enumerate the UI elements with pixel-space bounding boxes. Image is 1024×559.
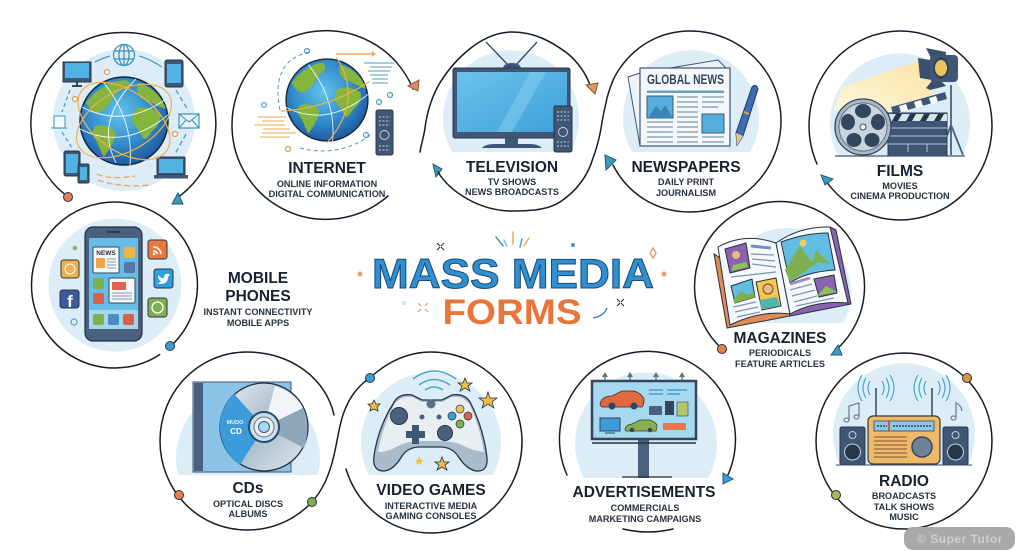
icon: music notes	[844, 403, 962, 422]
watermark	[904, 527, 1015, 550]
heading: PHONES	[225, 288, 291, 305]
node dot	[962, 374, 972, 382]
arrow head	[605, 155, 616, 170]
backdrop	[575, 372, 717, 478]
title line 2: FORMS	[442, 293, 582, 332]
description: COMMERCIALS	[611, 503, 679, 513]
light beam	[834, 60, 935, 112]
description: ONLINE INFORMATION	[277, 179, 377, 189]
backdrop	[830, 54, 970, 156]
description: MARKETING CAMPAIGNS	[589, 514, 701, 524]
ring	[32, 202, 198, 368]
description: TALK SHOWS	[874, 502, 934, 512]
panel: cds	[160, 352, 522, 533]
panel: mobile phones	[32, 202, 312, 368]
description: FEATURE ARTICLES	[735, 359, 825, 369]
panel: magazines	[695, 201, 865, 369]
description: DAILY PRINT	[658, 177, 714, 187]
icon: phone and tablet	[64, 151, 89, 183]
panel: radio	[816, 353, 992, 529]
ring lower stroke	[623, 529, 673, 532]
heading: NEWSPAPERS	[631, 159, 741, 176]
disc label: MUDO	[227, 420, 244, 426]
heading: TELEVISION	[466, 159, 558, 176]
ring upper	[420, 32, 590, 152]
icon: twitter	[154, 269, 173, 288]
icon: smartphone	[85, 227, 142, 341]
icon: rss	[148, 240, 167, 259]
arrow head	[408, 80, 419, 91]
icon: open magazine	[714, 227, 851, 328]
icon: remote	[554, 106, 572, 152]
icon: speakers	[840, 427, 968, 465]
icon: monitor	[63, 62, 91, 86]
photo: woman	[756, 278, 781, 310]
description: PERIODICALS	[749, 348, 811, 358]
globe	[280, 57, 370, 143]
description: ALBUMS	[229, 509, 267, 519]
arrow head	[821, 175, 833, 185]
photo: mountain	[781, 233, 835, 283]
masthead: GLOBAL NEWS	[647, 72, 724, 87]
end dot	[166, 342, 174, 350]
panel: advertisements	[559, 351, 735, 532]
watermark text: © Super Tutor	[917, 532, 1003, 546]
backdrop	[48, 218, 182, 352]
arrow head	[586, 83, 598, 94]
panel: newspapers	[438, 31, 781, 212]
description: MUSIC	[889, 512, 919, 522]
heading: CDs	[232, 480, 264, 497]
start dot	[64, 192, 72, 202]
description: INTERACTIVE MEDIA	[385, 501, 478, 511]
icon: billboard	[592, 372, 696, 478]
backdrop	[53, 49, 195, 191]
ring	[232, 31, 413, 219]
start dot	[718, 344, 726, 354]
icon: browser	[61, 260, 79, 278]
icon: whatsapp	[148, 298, 167, 317]
arrow head	[172, 193, 183, 204]
photo: portrait	[725, 243, 750, 273]
orbit lines	[64, 67, 184, 175]
node dot	[308, 498, 316, 506]
ring	[559, 351, 735, 477]
ground line	[835, 155, 965, 157]
description: CINEMA PRODUCTION	[850, 191, 950, 201]
icon: signal waves	[858, 375, 950, 401]
icon: clapperboard	[888, 92, 947, 156]
node dot	[832, 490, 840, 500]
globe	[80, 77, 168, 165]
icon: television	[453, 42, 570, 148]
icon: laptop	[154, 157, 188, 178]
panel: films	[809, 31, 992, 220]
icon: game controller	[374, 395, 487, 471]
icon: film reel	[835, 99, 891, 155]
sparkles	[358, 243, 666, 318]
ring	[816, 353, 992, 529]
node dot	[174, 490, 184, 500]
ring	[809, 31, 992, 220]
tv ad	[600, 418, 620, 433]
panel: internet	[232, 31, 419, 219]
ground line	[836, 464, 972, 466]
title line 1: MASS MEDIA	[372, 250, 654, 297]
icon: wifi waves	[413, 371, 456, 390]
photo: small landscape	[731, 279, 755, 303]
orbit nodes	[72, 70, 178, 136]
description: DIGITAL COMMUNICATION	[269, 189, 385, 199]
description: MOVIES	[882, 181, 918, 191]
ring	[695, 201, 865, 350]
accent dots	[71, 246, 77, 325]
description: BROADCASTS	[872, 491, 936, 501]
heading: INTERNET	[288, 160, 366, 177]
arrow head	[831, 345, 842, 355]
icon: pen	[736, 85, 758, 145]
copy lines	[649, 390, 687, 394]
backdrop	[623, 50, 759, 152]
data streams	[254, 51, 394, 151]
panel: video games	[361, 371, 501, 521]
ring with s-curve into video games	[160, 352, 522, 533]
heading: MOBILE	[228, 270, 288, 287]
heading: VIDEO GAMES	[376, 482, 486, 499]
description: TV SHOWS	[488, 177, 536, 187]
description: OPTICAL DISCS	[213, 499, 283, 509]
ring with s-curve from television	[438, 31, 781, 212]
description: INSTANT CONNECTIVITY	[204, 307, 312, 317]
description: NEWS BROADCASTS	[465, 187, 559, 197]
backdrop	[176, 386, 320, 475]
panel: connected devices globe	[31, 32, 216, 204]
arrow head	[723, 473, 733, 484]
small nodes	[262, 48, 392, 152]
antenna	[486, 42, 537, 65]
dashed links	[62, 56, 188, 186]
backdrop	[833, 363, 975, 465]
heading: FILMS	[877, 163, 923, 180]
car: green	[625, 420, 657, 432]
heading: RADIO	[879, 473, 929, 490]
icon: facebook	[60, 290, 79, 311]
news label: NEWS	[96, 250, 116, 257]
node dot	[366, 374, 374, 382]
description: MOBILE APPS	[227, 318, 289, 328]
icon: cd case	[193, 382, 308, 472]
disc label: CD	[230, 427, 242, 436]
icon: facebook: f	[67, 292, 73, 311]
icon: document	[51, 116, 67, 128]
arrow head	[433, 164, 442, 177]
heading: ADVERTISEMENTS	[572, 484, 716, 501]
icon: tablet	[165, 60, 183, 87]
description: JOURNALISM	[656, 188, 716, 198]
backdrop	[723, 228, 851, 323]
products	[649, 401, 688, 416]
car: orange	[600, 391, 644, 410]
icon: remote	[376, 110, 393, 155]
icons: stars	[368, 378, 497, 470]
icon: radio	[868, 388, 940, 464]
backdrop	[443, 50, 579, 152]
icon: newspaper	[628, 60, 730, 146]
burst rays	[496, 232, 529, 247]
photo: small sunset	[814, 275, 837, 297]
banner	[663, 423, 686, 430]
backdrop	[361, 373, 501, 475]
title	[358, 232, 666, 332]
icon: envelope	[179, 114, 199, 128]
ring	[31, 32, 216, 198]
heading: MAGAZINES	[734, 330, 826, 347]
icon: globe grid	[114, 44, 134, 66]
watermark pill	[904, 527, 1015, 550]
description: GAMING CONSOLES	[386, 511, 476, 521]
icon: spotlight	[918, 48, 963, 155]
panel: television	[420, 32, 598, 197]
